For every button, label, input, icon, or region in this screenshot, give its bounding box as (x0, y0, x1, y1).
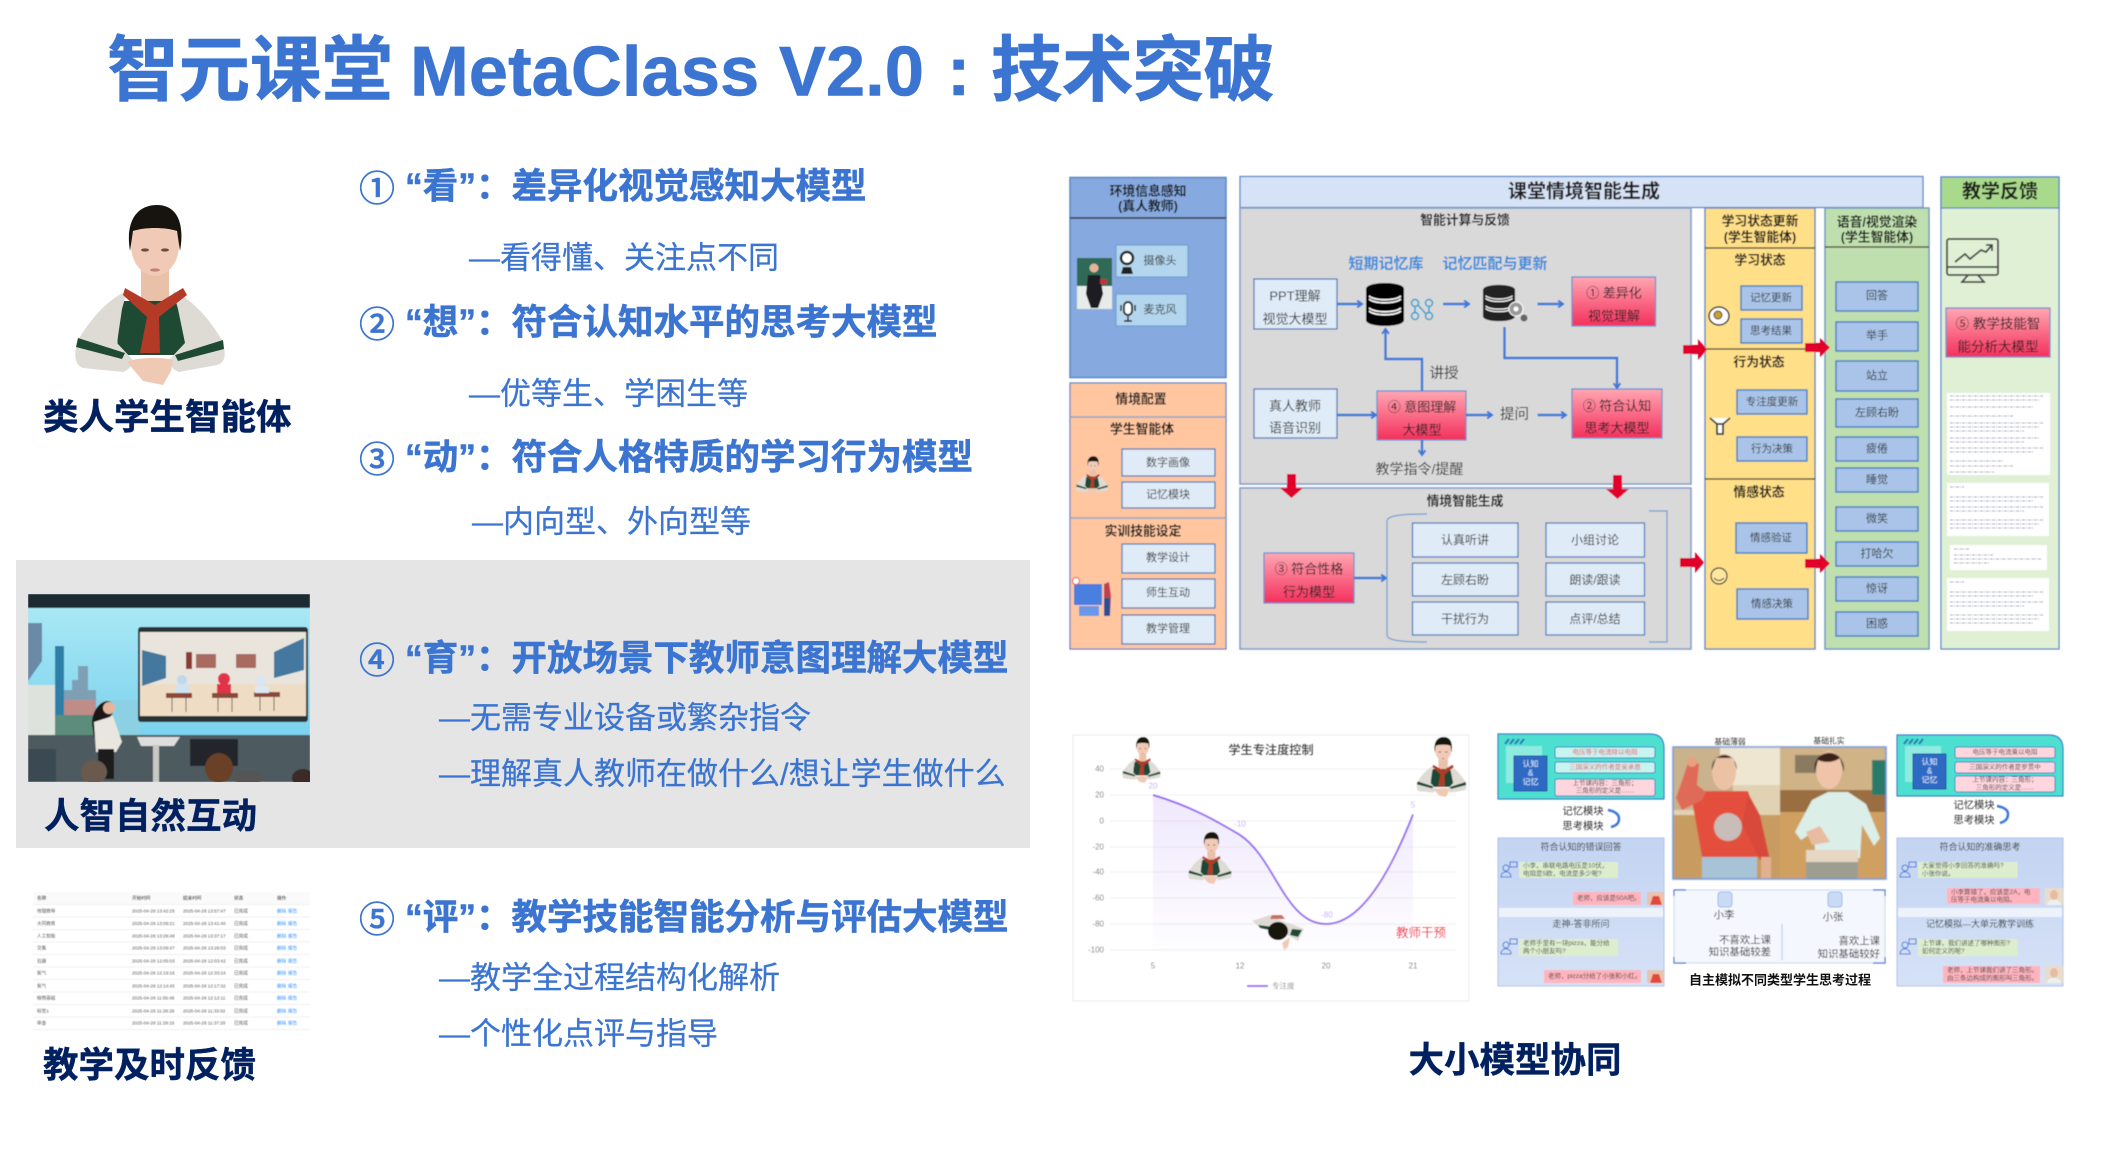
panel: cognitive dialogues, right: 记忆模拟—大单元教学训练 (1926, 918, 2034, 929)
box: model 2: 思考大模型 (1584, 420, 1650, 436)
action boxes: 举手 (1866, 328, 1888, 342)
box: model 3: 行为模型 (1283, 584, 1335, 600)
panel: intelligent computing and feedback: 记忆匹配与更新 (1442, 254, 1548, 272)
action boxes: 站立 (1866, 368, 1888, 382)
list item 1 (359, 160, 867, 276)
chart: student attention control: 5 (1411, 800, 1416, 810)
chart: student attention control: 5 (1151, 962, 1156, 970)
list item 4 (359, 632, 1009, 792)
panel: cognitive dialogues, right: 小张你说。 (1922, 868, 1954, 878)
box: model 1 (1572, 277, 1656, 326)
architecture diagram (1070, 176, 2059, 649)
teaching feedback table: 2025-04-28 13:28:48 (132, 934, 175, 938)
list item 2 (359, 296, 938, 412)
teaching feedback table: 标签1 (37, 1008, 49, 1014)
box: model 5: 能分析大模型 (1958, 340, 2038, 354)
chart: student attention control (1073, 735, 1469, 1001)
teaching feedback table: 删除 (277, 982, 287, 990)
list item 2: —优等生、学困生等 (469, 376, 748, 412)
panel: intelligent computing and feedback: 短期记忆库 (1348, 254, 1424, 272)
box: camera: 摄像头 (1144, 253, 1176, 267)
chart: student attention control: -40 (1092, 868, 1105, 876)
list item 3 (359, 431, 973, 540)
icon: head with gear (1709, 307, 1729, 325)
list item 3: ③ (359, 431, 395, 483)
box: memory module (1122, 482, 1215, 508)
panel: intelligent computing and feedback: 教学指令/提醒 (1376, 461, 1463, 477)
teaching feedback table: 地理教导 (37, 908, 56, 914)
panel: teaching feedback: 教学反馈 (1962, 180, 2038, 202)
panel: intelligent computing and feedback: 讲授 (1430, 365, 1458, 382)
teaching feedback table: 2025-04-28 12:33:24 (183, 970, 226, 976)
label: 类人学生智能体: 类人学生智能体 (43, 397, 292, 437)
card: student profiles: 喜欢上课 (1838, 934, 1881, 948)
list item 5: —教学全过程结构化解析 (439, 960, 780, 996)
box: model 3 (1264, 553, 1354, 603)
caption: student thinking simulation: 自主模拟不同类型学生思考过程 (1689, 972, 1871, 988)
chart: student attention control: 21 (1409, 962, 1418, 970)
icon: database with gear (1483, 285, 1528, 322)
panel: intelligent computing and feedback: 提问 (1500, 406, 1529, 423)
chart: student attention control: 20 (1149, 782, 1158, 790)
teaching feedback table: 名称 (37, 894, 47, 902)
box: model 2 (1572, 389, 1662, 438)
panel: learning state update: 学习状态 (1734, 252, 1786, 268)
behaviour options (1412, 523, 1644, 635)
teaching feedback table: 报告 (288, 908, 298, 914)
behaviour options: 点评/总结 (1569, 612, 1621, 626)
action boxes (1836, 282, 1918, 636)
teaching feedback table: 报告 (288, 958, 298, 964)
box: real teacher speech (1254, 389, 1337, 438)
panel: scenario configuration: 实训技能设定 (1105, 524, 1182, 538)
chart: student attention control: 20 (1095, 790, 1105, 800)
icon: smiley (1711, 568, 1727, 584)
teaching feedback table: 人工智能 (37, 932, 56, 940)
teaching feedback table: 已完成 (234, 908, 248, 914)
panel: environment perception: (真人教师) (1118, 198, 1178, 214)
teaching feedback table: 2025-04-28 12:05:03 (132, 958, 175, 964)
label: memory to thinking module, right (1953, 798, 2008, 826)
panel: cognitive dialogues, right: 老师，上节课我们讲了三角形。 (1947, 965, 2038, 974)
panel: memory and cognition, right: 三国演义的作者是罗贯中 (1969, 762, 2041, 771)
card: student profiles (1674, 890, 1885, 963)
panel: memory and cognition, left: 认知 (1522, 758, 1538, 768)
list item 5: ⑤ (359, 891, 395, 943)
box: lesson design: 教学设计 (1146, 550, 1190, 564)
chart: student attention control: -20 (1092, 842, 1105, 852)
panel: cognitive dialogues, right: 压等于电流乘以电阻。 (1951, 894, 2016, 904)
teaching feedback table: 报告 (288, 970, 298, 976)
title (107, 31, 1275, 111)
panel: learning state update (1705, 208, 1815, 649)
panel: cognitive dialogues, left: 两个小朋友吗? (1523, 946, 1566, 955)
list item 2: ② (359, 296, 395, 348)
red flow arrows (1280, 338, 1830, 573)
list item 5: “评”：教学技能智能分析与评估大模型 (405, 897, 1009, 937)
teaching feedback table: 2025-04-28 12:14:45 (132, 984, 175, 988)
title: 智元课堂 (107, 31, 393, 111)
chart: student attention control: -60 (1092, 894, 1105, 902)
teaching feedback table: 已完成 (234, 994, 248, 1002)
heading: classroom scenario generation (1240, 176, 1923, 208)
action boxes: 打哈欠 (1860, 546, 1894, 560)
teaching feedback table: 结束时间 (183, 894, 202, 902)
state boxes: 行为决策 (1751, 442, 1793, 455)
list item 1: “看”：差异化视觉感知大模型 (405, 166, 867, 206)
heading: classroom scenario generation: 课堂情境智能生成 (1508, 180, 1660, 202)
label: memory to thinking module, left (1562, 804, 1619, 832)
icon: person (1710, 418, 1730, 434)
panel: learning state update: 行为状态 (1733, 354, 1785, 370)
list item 4: —无需专业设备或繁杂指令 (439, 700, 811, 736)
teaching feedback table: 已完成 (234, 1020, 248, 1026)
panel: memory and cognition, right: 上节课内容：三角形； (1972, 774, 2038, 784)
box: lesson design (1122, 544, 1215, 573)
icon: teacher photo (1077, 258, 1112, 309)
chart: student attention control: 教师干预 (1396, 925, 1446, 940)
teaching feedback table: 2025-04-28 13:41:40 (183, 921, 226, 926)
teaching feedback table: 2025-04-28 13:57:47 (183, 908, 226, 914)
panel: scenario configuration: 情境配置 (1115, 392, 1167, 406)
teaching feedback table: 氧气 (37, 970, 47, 976)
teaching feedback table: 氧气 (37, 982, 47, 990)
box: camera (1116, 245, 1188, 277)
teaching feedback table: 删除 (277, 970, 287, 976)
panel: cognitive dialogues, left (1498, 838, 1664, 986)
box: real teacher speech: 语音识别 (1269, 420, 1321, 436)
action boxes: 睡觉 (1866, 473, 1888, 486)
chart: student attention control: 学生专注度控制 (1228, 742, 1314, 757)
panel: cognitive dialogues, right (1897, 838, 2063, 986)
teaching feedback table: 2025-04-28 11:33:02 (183, 1008, 226, 1014)
box: model 4: ④ 意图理解 (1388, 400, 1456, 414)
box: model 4 (1377, 391, 1466, 440)
panel: memory and cognition, left: 记忆 (1522, 776, 1538, 786)
panel: cognitive dialogues, right: 由三条边构成的图形叫三角形。 (1947, 973, 2038, 982)
panel: learning state update: 学习状态更新 (1722, 214, 1799, 228)
action boxes: 疲倦 (1866, 441, 1888, 455)
teaching feedback table: 2025-04-28 12:03:42 (183, 958, 226, 964)
photo: teacher presenting to virtual classroom (28, 594, 314, 787)
chart: student attention control: -10 (1234, 820, 1246, 828)
box: memory module: 记忆模块 (1146, 488, 1190, 501)
teaching feedback table: 删除 (277, 920, 287, 927)
state boxes: 情感决策 (1751, 597, 1793, 610)
panel: cognitive dialogues, left: 老师手里有一块pizza，能分给 (1523, 938, 1610, 947)
teaching feedback table: 已完成 (234, 944, 248, 952)
teaching feedback table: 操作 (277, 894, 287, 902)
chart: student attention control: 20 (1322, 962, 1331, 970)
list item 3: —内向型、外向型等 (472, 504, 751, 540)
label: memory to thinking module, left: 记忆模块 (1562, 804, 1604, 818)
box: teacher-student interaction (1122, 579, 1215, 608)
box: teaching management (1122, 615, 1215, 644)
list item 4: “育”：开放场景下教师意图理解大模型 (405, 638, 1009, 678)
box: model 4: 大模型 (1402, 422, 1442, 438)
behaviour options: 干扰行为 (1441, 612, 1489, 626)
list item 4: —理解真人教师在做什么/想让学生做什么 (439, 756, 1006, 792)
box: model 5: ⑤ 教学技能智 (1956, 316, 2040, 332)
teaching feedback table: 2025-04-28 12:19:16 (132, 970, 175, 976)
action boxes: 回答 (1866, 288, 1888, 302)
box: microphone: 麦克风 (1144, 303, 1176, 316)
label: 教学及时反馈: 教学及时反馈 (43, 1045, 256, 1085)
teaching feedback table: 已完成 (234, 932, 248, 940)
panel: memory and cognition, left: & (1528, 768, 1534, 778)
panel: scenario configuration (1070, 383, 1226, 649)
panel: cognitive dialogues, left: 老师，应该是50A吧。 (1577, 893, 1641, 902)
teaching feedback table: 报告 (288, 982, 298, 990)
behaviour options: 认真听讲 (1441, 532, 1489, 547)
panel: memory and cognition, left: 电压等于电流除以电阻 (1572, 747, 1638, 756)
list item 4: ④ (359, 632, 395, 684)
label: memory to thinking module, left: 思考模块 (1562, 820, 1604, 832)
box: teaching management: 教学管理 (1146, 621, 1190, 635)
teaching feedback table: 已完成 (234, 920, 248, 927)
box: PPT vision model: PPT理解 (1269, 288, 1321, 304)
teaching feedback table: 开始时间 (132, 894, 151, 902)
panel: cognitive dialogues, left: 走神-答非所问 (1552, 918, 1610, 929)
chart: student attention control: 专注度 (1272, 980, 1295, 990)
teaching feedback table: 2025-04-28 11:37:29 (183, 1020, 226, 1026)
labels above student photo (1714, 736, 1845, 746)
chart: student attention control: -80 (1321, 910, 1333, 920)
panel: teaching feedback (1941, 177, 2059, 649)
icon: monitor with chart (1947, 239, 1998, 282)
box: digital portrait: 数字画像 (1146, 455, 1190, 469)
panel: cognitive dialogues, left: 老师，pizza分给了小张和小红。 (1548, 971, 1641, 980)
teaching feedback table: 2025-04-28 13:09:21 (132, 921, 175, 926)
teaching feedback table: 2025-04-28 11:55:48 (132, 996, 175, 1000)
panel: cognitive dialogues, right: 小李算错了，应该是2A，电 (1951, 887, 2031, 896)
panel: memory and cognition, right: 电压等于电流乘以电阻 (1972, 747, 2038, 756)
panel: cognitive dialogues, left: 电阻是5欧，电流是多少呢? (1523, 868, 1602, 878)
teaching feedback table: 报告 (288, 1008, 298, 1014)
card: student profiles: 不喜欢上课 (1719, 934, 1772, 946)
teaching feedback table: 报告 (288, 920, 298, 927)
teaching feedback table: 2025-04-28 13:42:25 (132, 908, 175, 914)
box: PPT vision model (1254, 279, 1337, 329)
title: 技术突破 (991, 31, 1275, 111)
state boxes: 思考结果 (1750, 324, 1792, 337)
chart: student attention control: 12 (1236, 962, 1245, 970)
teaching feedback table: 删除 (277, 1008, 287, 1014)
list item 1: ① (359, 160, 395, 212)
box: model 1: ① 差异化 (1586, 286, 1642, 300)
card: student profiles: 小李 (1714, 908, 1735, 922)
generated reports (1947, 393, 2050, 631)
humanoid student agent illustration (75, 205, 225, 385)
panel: cognitive dialogues, right: 符合认知的准确思考 (1939, 841, 2021, 852)
label: 人智自然互动: 人智自然互动 (44, 796, 257, 836)
teaching feedback table: 大同教育 (37, 920, 56, 927)
panel: intelligent computing and feedback: 智能计算与反馈 (1420, 212, 1510, 228)
list item 2: “想”：符合认知水平的思考大模型 (405, 302, 938, 342)
teaching feedback table: 删除 (277, 1020, 287, 1026)
teaching feedback table: 删除 (277, 944, 287, 952)
panel: memory and cognition, right (1897, 735, 2063, 796)
box: model 2: ② 符合认知 (1583, 398, 1651, 414)
panel: cognitive dialogues, right: 如何定义的呢? (1922, 946, 1965, 955)
chart: student attention control: -80 (1092, 920, 1105, 928)
panel: cognitive dialogues, right: 上节课，我们讲述了哪种图形? (1922, 938, 2010, 947)
box: PPT vision model: 视觉大模型 (1262, 312, 1328, 326)
icon: short-term memory database (1366, 283, 1404, 326)
teaching feedback table: 报告 (288, 932, 298, 940)
teaching feedback table: 报告 (288, 994, 298, 1002)
list item 1: —看得懂、关注点不同 (469, 240, 779, 276)
teaching feedback table: 删除 (277, 994, 287, 1002)
chart: student attention control: 0 (1100, 816, 1105, 826)
teaching feedback table: 2025-04-28 13:37:17 (183, 934, 226, 938)
title: MetaClass V2.0 (410, 32, 924, 110)
panel: environment perception: 环境信息感知 (1110, 184, 1186, 198)
box: model 5 (1946, 308, 2050, 357)
behaviour options: 小组讨论 (1571, 533, 1619, 547)
teaching feedback table: 已完成 (234, 970, 248, 976)
panel: intelligent computing and feedback (1240, 208, 1691, 484)
state boxes: 专注度更新 (1746, 395, 1799, 408)
panel: memory and cognition, left: 三角形的定义是…… (1576, 786, 1634, 794)
teaching feedback table: 2025-04-28 11:28:28 (132, 1008, 175, 1014)
labels above student photo: 基础薄弱 (1714, 736, 1746, 746)
labels above student photo: 基础扎实 (1813, 736, 1845, 746)
action boxes: 微笑 (1866, 511, 1888, 525)
panel: learning state update: 情感状态 (1733, 484, 1785, 500)
box: microphone (1116, 294, 1187, 326)
teaching feedback table: 已完成 (234, 982, 248, 990)
label: memory to thinking module, right: 记忆模块 (1953, 798, 1995, 812)
card: student profiles: 小张 (1823, 912, 1844, 924)
behaviour options: 朗读/跟读 (1569, 573, 1621, 587)
teaching feedback table (33, 892, 310, 1030)
panel: cognitive dialogues, left: 符合认知的错误回答 (1540, 841, 1622, 852)
action boxes: 惊讶 (1866, 581, 1888, 595)
teaching feedback table: 2025-04-28 13:26:03 (183, 946, 226, 950)
box: model 3: ③ 符合性格 (1275, 562, 1343, 576)
box: model 1: 视觉理解 (1588, 308, 1640, 324)
arrows (1337, 304, 1617, 455)
box: real teacher speech: 真人教师 (1269, 398, 1321, 414)
list item 3: “动”：符合人格特质的学习行为模型 (405, 437, 973, 477)
panel: speech and visual rendering: (学生智能体) (1841, 230, 1913, 244)
panel: memory and cognition, left: 上节课内容：三角形； (1572, 778, 1638, 787)
panel: environment perception (1070, 178, 1226, 378)
panel: speech and visual rendering (1825, 208, 1929, 649)
panel: memory and cognition, left (1498, 734, 1664, 799)
list item 5 (359, 891, 1009, 1052)
teaching feedback table: 删除 (277, 932, 287, 940)
teaching feedback table: 报告 (288, 944, 298, 952)
chart: student attention control: 40 (1095, 764, 1105, 774)
teaching feedback table: 2025-04-28 11:29:15 (132, 1020, 175, 1026)
label: 大小模型协同: 大小模型协同 (1408, 1040, 1622, 1080)
state boxes: 情感验证 (1750, 531, 1792, 544)
label: memory to thinking module, right: 思考模块 (1953, 814, 1995, 826)
behaviour options: 左顾右盼 (1441, 572, 1489, 587)
teaching feedback table: 植物基础 (37, 994, 56, 1002)
action boxes: 左顾右盼 (1855, 405, 1899, 419)
teaching feedback table: 2025-04-28 13:09:47 (132, 946, 175, 950)
teaching feedback table: 删除 (277, 908, 287, 914)
panel: memory and cognition, right: 三角形的定义是…… (1976, 782, 2034, 792)
teaching feedback table: 审查 (37, 1020, 47, 1026)
teaching feedback table: 删除 (277, 958, 287, 964)
grey highlight band (16, 560, 1030, 848)
panel: memory and cognition, left: 三国演义的作者是吴承恩 (1569, 762, 1641, 771)
teaching feedback table: 状态 (234, 894, 244, 902)
panel: cognitive dialogues, left: 小李，串联电路电压是10伏， (1523, 860, 1608, 870)
panel: scenario intelligence generation: 情境智能生成 (1427, 494, 1504, 508)
card: student profiles: 知识基础较差 (1709, 946, 1771, 958)
chart: student attention control: -100 (1088, 946, 1105, 954)
teaching feedback table: 交集 (37, 944, 47, 952)
card: student profiles: 知识基础较好 (1818, 948, 1880, 960)
teaching feedback table: 报告 (288, 1020, 298, 1026)
teaching feedback table: 2025-04-28 12:17:32 (183, 984, 226, 988)
teaching feedback table: 石器 (37, 958, 47, 964)
state boxes: 记忆更新 (1750, 291, 1792, 304)
box: digital portrait (1122, 449, 1215, 476)
photo: two simulated students (1673, 745, 1886, 879)
panel: cognitive dialogues, right: 大家觉得小李回答的准确吗? (1922, 860, 2004, 870)
state boxes (1736, 286, 1808, 619)
box: teacher-student interaction: 师生互动 (1146, 585, 1190, 599)
teaching feedback table: 已完成 (234, 958, 248, 964)
panel: memory and cognition, right: 认知 (1922, 756, 1938, 766)
title: : (947, 32, 970, 110)
teaching feedback table: 已完成 (234, 1008, 248, 1014)
icon: memory network (1412, 300, 1432, 320)
panel: scenario intelligence generation (1240, 488, 1691, 649)
panel: memory and cognition, right: & (1927, 766, 1933, 776)
panel: speech and visual rendering: 语音/视觉渲染 (1837, 214, 1917, 230)
panel: scenario configuration: 学生智能体 (1110, 422, 1174, 436)
teaching feedback table: 2025-04-28 12:12:11 (183, 996, 226, 1000)
panel: memory and cognition, right: 记忆 (1922, 774, 1938, 784)
action boxes: 困惑 (1866, 616, 1888, 630)
list item 5: —个性化点评与指导 (439, 1016, 718, 1052)
panel: learning state update: (学生智能体) (1724, 230, 1796, 244)
icon: teacher at board (1072, 578, 1111, 616)
